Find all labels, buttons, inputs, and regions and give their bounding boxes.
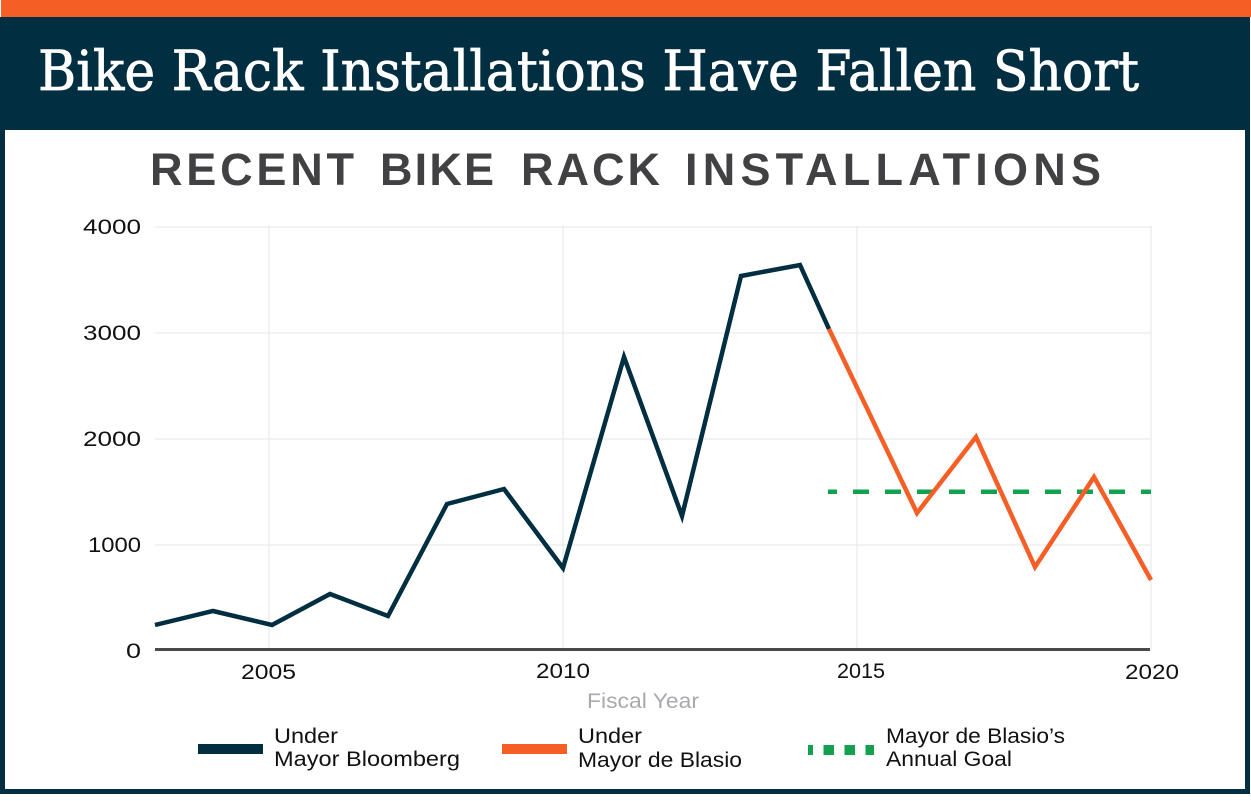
legend: Bloomberg: Mayor Bloomberg xyxy=(274,748,460,771)
y axis labels: 4000 xyxy=(83,216,141,239)
y axis labels: 2000 xyxy=(83,428,141,451)
legend: de Blasio: Under xyxy=(578,725,642,748)
legend: de Blasio xyxy=(502,725,742,772)
orange top bar xyxy=(1,0,1251,17)
chart heading: BIKE xyxy=(380,144,494,195)
chart heading: RACK xyxy=(521,144,660,195)
title: Bike Rack Installations Have Fallen Short xyxy=(38,39,1139,103)
y axis labels: 3000 xyxy=(83,322,141,345)
x axis labels xyxy=(241,660,1179,684)
legend: de Blasio: Mayor de Blasio xyxy=(578,749,742,772)
x axis labels: 2020 xyxy=(1125,661,1179,684)
x axis xyxy=(155,648,1150,651)
y axis labels xyxy=(83,216,141,663)
goal line xyxy=(828,489,1151,494)
chart heading: RECENT xyxy=(150,144,354,195)
x axis labels: 2010 xyxy=(536,660,590,683)
legend: annual goal: Annual Goal xyxy=(886,748,1012,771)
grid lines xyxy=(155,226,1151,650)
legend xyxy=(198,725,1065,772)
y axis labels: 1000 xyxy=(88,534,141,557)
y axis labels: 0 xyxy=(126,640,141,663)
legend: Bloomberg xyxy=(198,725,460,771)
de Blasio line xyxy=(829,329,1151,580)
x axis labels: 2005 xyxy=(241,661,296,684)
x axis title: Fiscal Year xyxy=(587,690,699,713)
chart heading: INSTALLATIONS xyxy=(685,144,1101,195)
x axis labels: 2015 xyxy=(837,660,885,683)
legend: annual goal xyxy=(808,725,1065,771)
Bloomberg line xyxy=(155,265,829,625)
legend: annual goal: Mayor de Blasio’s xyxy=(886,725,1065,748)
line chart of installations xyxy=(83,216,1179,713)
legend: Bloomberg: Under xyxy=(274,725,338,748)
